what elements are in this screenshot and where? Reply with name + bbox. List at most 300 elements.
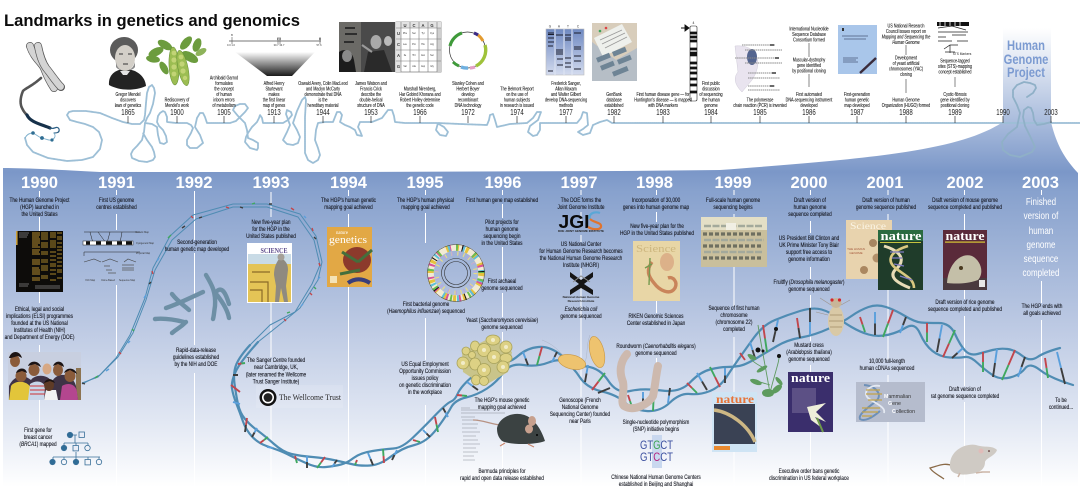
table: genetic code codons: Arg bbox=[430, 43, 435, 46]
event texts 1990 to 2003: (later renamed the Wellcome bbox=[246, 372, 306, 379]
event texts 1990 to 2003: implications (ELSI) programmes bbox=[6, 313, 73, 320]
year labels on timeline bbox=[121, 107, 1058, 117]
event texts on timeline: First automated bbox=[796, 91, 822, 97]
event texts 1990 to 2003: Executive order bans genetic bbox=[779, 468, 840, 475]
event texts 1990 to 2003: sequencing begins bbox=[713, 204, 753, 211]
year labels on timeline: 1985 bbox=[753, 107, 767, 117]
event texts on timeline: Gregor Mendel bbox=[116, 91, 140, 97]
year labels on timeline: 1972 bbox=[461, 107, 475, 117]
diagram: recombinant DNA plasmid bbox=[450, 32, 486, 68]
table: genetic code codons: Asn bbox=[421, 54, 426, 57]
event texts 1990 to 2003: To be bbox=[1055, 397, 1067, 404]
year headers 1990 to 2003: 1992 bbox=[176, 173, 212, 192]
table: genetic code codons: Phe bbox=[403, 32, 408, 35]
event texts 1990 to 2003: (chromosome 22) bbox=[716, 319, 753, 326]
event texts 1990 to 2003: US Equal Employment bbox=[401, 361, 449, 368]
event texts on timeline: map developed bbox=[844, 103, 870, 108]
event texts on timeline: develop DNA-sequencing bbox=[545, 97, 588, 103]
HGP label in top timeline bbox=[1004, 38, 1048, 80]
diagram: sequence-tagged sites map bbox=[937, 22, 972, 56]
photo: Watson and Crick bbox=[339, 22, 395, 72]
event texts on timeline: Huntington's disease — is mapped bbox=[634, 97, 692, 103]
year headers 1990 to 2003: 1998 bbox=[636, 173, 673, 192]
image: E. coli bacteria bbox=[542, 335, 608, 372]
table: genetic code codons: Thr bbox=[412, 54, 416, 57]
event texts on timeline: of yeast artificial bbox=[893, 60, 919, 66]
year headers 1990 to 2003: 1993 bbox=[253, 173, 289, 192]
event texts 1990 to 2003: Joint Genome Institute bbox=[557, 204, 605, 211]
event texts 1990 to 2003: Rapid-data-release bbox=[176, 347, 216, 354]
event texts on timeline: Archibald Garrod bbox=[210, 75, 239, 81]
year labels on timeline: 1977 bbox=[559, 107, 573, 117]
table: genetic code codons: A bbox=[397, 53, 400, 58]
event texts on timeline: discovers bbox=[120, 97, 136, 103]
event texts 1990 to 2003: Sequencing Center) founded bbox=[550, 411, 610, 418]
year labels on timeline: 1982 bbox=[607, 107, 621, 117]
event texts 1990 to 2003: Institute (NHGRI) bbox=[563, 262, 599, 269]
event texts 1990 to 2003: Draft version of human bbox=[862, 197, 910, 204]
event texts 1990 to 2003: mapping goal achieved bbox=[401, 204, 450, 211]
event texts on timeline: Organization (HUGO) formed bbox=[882, 102, 931, 108]
event texts 1990 to 2003: Genoscope (French bbox=[559, 397, 601, 404]
event texts on timeline bbox=[115, 23, 972, 108]
image: lab mouse with genetic map table bbox=[461, 408, 545, 460]
sequence: SNP GTGCT alignment: GTGCT bbox=[640, 438, 674, 452]
image: Arabidopsis plant bbox=[747, 325, 784, 397]
image: Nature 2000 Arabidopsis cover: nature bbox=[791, 371, 831, 385]
event texts 1990 to 2003: Center established in Japan bbox=[627, 320, 685, 327]
event texts on timeline: First-generation bbox=[844, 91, 870, 97]
title: Landmarks in genetics and genomics bbox=[4, 11, 300, 30]
event texts on timeline: of metabolism bbox=[212, 103, 236, 108]
event texts 1990 to 2003: sequence completed bbox=[788, 211, 832, 218]
event texts 1990 to 2003: New five-year plan bbox=[252, 219, 290, 226]
event texts on timeline: The Belmont Report bbox=[500, 86, 534, 92]
event texts on timeline: makes bbox=[268, 92, 280, 97]
event texts on timeline: positional cloning bbox=[941, 103, 970, 108]
image: Nature 2000 Arabidopsis cover bbox=[788, 371, 833, 432]
logo: National Human Genome Research Institute: National Human Genome bbox=[563, 295, 600, 299]
event texts on timeline: in research is issued bbox=[500, 103, 534, 108]
photo: sequencing laboratory 1999 bbox=[701, 217, 767, 267]
year headers 1990 to 2003: 1990 bbox=[21, 173, 58, 192]
event texts on timeline: Oswald Avery, Colin MacLeod bbox=[298, 80, 348, 86]
event texts 1990 to 2003: in the workplace bbox=[408, 389, 442, 396]
diagram: polymerase chain reaction bbox=[735, 45, 782, 92]
event texts on timeline: human genetic bbox=[845, 97, 870, 103]
logo: Mammalian Gene Collection bbox=[856, 382, 925, 422]
event texts on timeline: Har Gobind Khorana and bbox=[399, 91, 441, 97]
diagram: bacterial genome ring bbox=[428, 244, 484, 302]
image: Science anatomy cover 1998: Science bbox=[636, 244, 677, 255]
diagram: chromosome 4 with Huntington marker: 4 bbox=[693, 21, 695, 25]
event texts on timeline: The polymerase bbox=[747, 97, 774, 103]
image: HGP report cover bbox=[838, 25, 877, 74]
year labels on timeline: 1953 bbox=[364, 107, 378, 117]
event texts 1990 to 2003: (SNP) initiative begins bbox=[633, 426, 679, 433]
image: Science 2001 cover: THE HUMAN bbox=[847, 247, 865, 251]
event texts 1990 to 2003: centres established bbox=[96, 204, 137, 211]
image: Nature Genetics cover bbox=[327, 227, 372, 287]
event texts on timeline: the genetic code bbox=[406, 103, 434, 108]
diagram: sequence-tagged sites map: STS Markers bbox=[953, 52, 972, 56]
event texts on timeline: Marshall Nirenberg, bbox=[404, 86, 436, 92]
diagram: genetic, cytogenetic and physical maps 1991: Sequence Map bbox=[119, 279, 136, 282]
event texts 1990 to 2003: The DOE forms the bbox=[561, 197, 601, 204]
event texts 1990 to 2003: for the HGP in the bbox=[252, 226, 290, 233]
icon: chromosome X with unravelling DNA bbox=[21, 46, 61, 142]
event texts on timeline: human subjects bbox=[504, 97, 531, 103]
event texts 1990 to 2003: The Human Genome Project bbox=[10, 197, 70, 204]
logo: Mammalian Gene Collection: Collection bbox=[892, 409, 915, 415]
event texts 1990 to 2003: founded at the US National bbox=[11, 320, 68, 327]
table: genetic code codons: Leu bbox=[403, 43, 408, 46]
event texts on timeline: the first linear bbox=[263, 97, 286, 103]
event texts on timeline: Frederick Sanger, bbox=[551, 80, 581, 86]
callout: finished version of human genome sequence completed: human bbox=[1029, 225, 1053, 236]
event texts 1990 to 2003: continued... bbox=[1049, 404, 1074, 411]
table: genetic code codons: Ser bbox=[430, 54, 434, 57]
event texts 1990 to 2003: (HGP) launched in bbox=[20, 204, 59, 211]
event texts on timeline: is the bbox=[319, 97, 328, 103]
image: Science 2001 cover: GENOME bbox=[849, 251, 863, 255]
callout: finished version of human genome sequence completed: genome bbox=[1027, 239, 1055, 250]
diagram: genetic, cytogenetic and physical maps 1991: Clone-Based bbox=[101, 279, 116, 282]
event texts 1990 to 2003: Ethical, legal and social bbox=[15, 306, 64, 313]
event texts 1990 to 2003: The HGP's human genetic bbox=[321, 197, 376, 204]
event texts on timeline: the human bbox=[702, 97, 720, 103]
event texts 1990 to 2003: chromosome bbox=[720, 312, 748, 319]
image: Science cover 1993 bbox=[247, 243, 292, 303]
event texts on timeline: methods bbox=[559, 103, 574, 108]
event texts on timeline: Mendel's work bbox=[165, 102, 189, 108]
image: yeast cells bbox=[457, 335, 512, 386]
year headers 1990 to 2003: 1994 bbox=[330, 173, 368, 192]
event texts 1990 to 2003: genome sequenced bbox=[481, 285, 523, 292]
logo: National Human Genome Research Institute bbox=[563, 272, 600, 303]
photo: children ethical implications bbox=[8, 352, 81, 400]
diagram: genetic, cytogenetic and physical maps 1991 bbox=[83, 231, 155, 282]
event texts 1990 to 2003: genome sequenced bbox=[635, 350, 677, 357]
event texts on timeline: map of genes bbox=[263, 103, 286, 108]
callout: finished version of human genome sequence completed bbox=[1023, 196, 1059, 278]
image: Science 2001 cover bbox=[846, 220, 892, 279]
event texts on timeline: database bbox=[606, 97, 622, 103]
event texts 1990 to 2003: genome sequence published bbox=[856, 204, 916, 211]
diagram: BRCA1 pedigree bbox=[50, 432, 102, 465]
event texts on timeline: Robert Holley determine bbox=[400, 97, 441, 103]
event texts on timeline: DNA-sequencing instrument bbox=[786, 97, 833, 103]
event texts 1990 to 2003: Draft version of rice genome bbox=[935, 299, 995, 306]
event texts on timeline: Muscular-dystrophy bbox=[793, 57, 826, 63]
event texts 1990 to 2003: 10,000 full-length bbox=[869, 358, 905, 365]
event texts on timeline: chain reaction (PCR) is invented bbox=[733, 102, 787, 108]
sequence: SNP GTGCT alignment: GTCCT bbox=[640, 450, 674, 464]
event texts on timeline: Human Genome bbox=[892, 97, 920, 103]
event texts 1990 to 2003: First bacterial genome bbox=[403, 301, 449, 308]
year labels on timeline: 1974 bbox=[510, 107, 524, 117]
table: genetic code codons: Cys bbox=[430, 32, 435, 35]
chart: first linear gene map bbox=[227, 33, 322, 76]
event texts 1990 to 2003: mapping goal achieved bbox=[324, 204, 373, 211]
image: Nature Genetics cover: genetics bbox=[329, 235, 367, 246]
event texts on timeline: established bbox=[605, 103, 624, 108]
event texts on timeline: developed bbox=[800, 103, 818, 108]
table: genetic code codons: Gly bbox=[430, 65, 435, 68]
table: genetic code codons: Ala bbox=[412, 65, 416, 68]
event texts on timeline: James Watson and bbox=[355, 80, 387, 86]
event texts on timeline: on the use of bbox=[506, 91, 528, 97]
event texts on timeline: Human Genome bbox=[892, 40, 920, 45]
event texts 1990 to 2003: discrimination in US federal workplace bbox=[769, 475, 849, 482]
event texts on timeline: Consortium formed bbox=[793, 37, 825, 43]
event texts on timeline: hereditary material bbox=[308, 103, 338, 108]
event texts 1990 to 2003: First gene for bbox=[24, 427, 52, 434]
event texts on timeline: the concept bbox=[214, 86, 234, 92]
logo: Mammalian Gene Collection: Mammalian bbox=[884, 394, 911, 400]
event texts 1990 to 2003: breast cancer bbox=[24, 434, 52, 441]
event texts on timeline: chromosomes (YAC) bbox=[889, 66, 924, 72]
event texts 1990 to 2003: (BRCA1) mapped bbox=[19, 441, 57, 448]
logo: Joint Genome Institute bbox=[558, 211, 604, 233]
event texts on timeline: US National Research bbox=[888, 23, 925, 29]
diagram: genetic, cytogenetic and physical maps 1991: Physical Map bbox=[136, 252, 151, 255]
event texts on timeline: Allan Maxam bbox=[555, 86, 577, 92]
logo: The Wellcome Trust: The Wellcome Trust bbox=[279, 393, 342, 402]
table: genetic code codons: C bbox=[412, 23, 416, 28]
event texts 1990 to 2003: US President Bill Clinton and bbox=[779, 235, 839, 242]
image: Nature 2002 mouse cover bbox=[943, 229, 987, 290]
chromosome thread running along the timeline bbox=[25, 82, 1080, 163]
event texts on timeline: demonstrate that DNA bbox=[305, 92, 341, 97]
event texts 1990 to 2003: The HGP ends with bbox=[1022, 303, 1062, 310]
table: genetic code codons: G bbox=[397, 64, 400, 69]
diagram: genetic, cytogenetic and physical maps 1991: Cytogenetic Map bbox=[136, 242, 155, 245]
event texts on timeline: laws of genetics bbox=[115, 103, 142, 108]
event texts 1990 to 2003: for Human Genome Research becomes bbox=[539, 248, 623, 255]
table: genetic code codons: C bbox=[397, 42, 400, 47]
year headers 1990 to 2003: 1991 bbox=[98, 173, 135, 192]
event texts 1990 to 2003: RIKEN Genomic Sciences bbox=[629, 313, 684, 320]
event texts 1990 to 2003: near Cambridge, UK, bbox=[254, 365, 298, 371]
event texts on timeline: Stanley Cohen and bbox=[452, 80, 484, 86]
year guide lines bbox=[40, 190, 1042, 487]
event texts 1990 to 2003 bbox=[5, 197, 1074, 487]
chart: first linear gene map: B bbox=[231, 33, 233, 37]
year headers 1990 to 2003: 2000 bbox=[791, 173, 827, 192]
event texts on timeline: gene identified bbox=[797, 62, 822, 68]
event texts 1990 to 2003: Escherichia coli bbox=[565, 306, 598, 313]
image: DNA sequencing gel bbox=[546, 24, 584, 75]
event texts 1990 to 2003: sequence completed and published bbox=[928, 306, 1002, 313]
event texts 1990 to 2003: First archaeal bbox=[488, 278, 516, 285]
event texts 1990 to 2003: Draft version of bbox=[794, 197, 826, 204]
event texts 1990 to 2003: issues policy bbox=[412, 375, 439, 382]
event texts on timeline: and Maclyn McCarty bbox=[306, 86, 341, 92]
year labels on timeline: 1944 bbox=[316, 107, 330, 117]
year headers 1990 to 2003: 2001 bbox=[867, 173, 903, 192]
event texts 1990 to 2003: Chinese National Human Genome Centers bbox=[611, 474, 701, 481]
year labels on timeline: 1989 bbox=[948, 107, 962, 117]
table: genetic code codons: A bbox=[421, 23, 425, 28]
event texts 1990 to 2003: Opportunity Commission bbox=[399, 368, 451, 375]
event texts on timeline: recombinant bbox=[458, 97, 479, 103]
event texts 1990 to 2003: First US genome bbox=[99, 197, 134, 204]
image: DNA sequencing gel: G bbox=[549, 24, 552, 28]
event texts 1990 to 2003: Institutes of Health (NIH) bbox=[14, 327, 65, 334]
callout: finished version of human genome sequence completed: version of bbox=[1024, 210, 1059, 221]
event texts on timeline: Council issues report on bbox=[886, 28, 926, 34]
event texts 1990 to 2003: all goals achieved bbox=[1023, 310, 1061, 317]
image: DNA sequencing gel: C bbox=[577, 24, 580, 28]
year headers 1990 to 2003: 2003 bbox=[1022, 173, 1059, 192]
panel: Human Genome Project timeline 1990 to 2003 bbox=[5, 173, 1074, 487]
year labels on timeline: 1966 bbox=[413, 107, 427, 117]
event texts 1990 to 2003: Trust Sanger Institute) bbox=[253, 379, 299, 386]
event texts 1990 to 2003: Pilot projects for bbox=[485, 219, 519, 226]
year labels on timeline: 1984 bbox=[704, 107, 718, 117]
event texts on timeline: GenBank bbox=[606, 91, 622, 97]
table: genetic code codons: Ile bbox=[404, 54, 407, 57]
image: Nature 2001 cover with DNA bbox=[878, 229, 923, 290]
year ticks on timeline bbox=[128, 116, 1051, 123]
event texts on timeline: formulates bbox=[215, 80, 233, 86]
table: genetic code codons: Ser bbox=[412, 32, 416, 35]
event texts 1990 to 2003: The HGP's mouse genetic bbox=[475, 397, 530, 404]
event texts 1990 to 2003: in the United States bbox=[481, 240, 523, 247]
table: genetic code codons: Asp bbox=[421, 65, 426, 68]
logo: Joint Genome Institute: DOE JOINT GENOME INSTITUTE bbox=[558, 229, 604, 233]
year labels on timeline: 1865 bbox=[121, 107, 135, 117]
logo: National Human Genome Research Institute: Research Institute bbox=[568, 299, 595, 303]
event texts 1990 to 2003: support free access to bbox=[786, 249, 832, 256]
panel: pre-project timeline 1865 to 1989 bbox=[21, 21, 1080, 163]
event texts 1990 to 2003: human cDNAs sequenced bbox=[860, 365, 914, 372]
event texts on timeline: sites (STS)-mapping bbox=[938, 63, 972, 69]
event texts on timeline: First human disease gene — for bbox=[636, 91, 690, 97]
event texts on timeline: of human bbox=[216, 92, 232, 97]
event texts 1990 to 2003: sequencing begin bbox=[484, 233, 520, 240]
year labels on timeline: 1988 bbox=[899, 107, 913, 117]
table: genetic code codons: His bbox=[421, 43, 426, 46]
event texts on timeline: Rediscovery of bbox=[165, 97, 190, 103]
event texts 1990 to 2003: rat genome sequence completed bbox=[931, 393, 999, 400]
event texts 1990 to 2003: human genome bbox=[794, 204, 826, 211]
event texts on timeline: discussion bbox=[702, 86, 720, 92]
sequence: SNP GTGCT alignment bbox=[640, 435, 674, 468]
event texts on timeline: inborn errors bbox=[213, 97, 235, 103]
event texts 1990 to 2003: The Sanger Centre founded bbox=[247, 357, 305, 364]
event texts 1990 to 2003: HGP in the United States published bbox=[620, 230, 694, 237]
event texts 1990 to 2003: guidelines established bbox=[173, 354, 219, 361]
event texts 1990 to 2003: Draft version of mouse genome bbox=[932, 197, 998, 204]
event texts 1990 to 2003: Single-nucleotide polymorphism bbox=[623, 419, 690, 426]
event texts 1990 to 2003: human genome bbox=[486, 226, 518, 233]
event texts on timeline: First public bbox=[702, 80, 721, 86]
chart: first linear gene map: 30.7 33.7 bbox=[274, 43, 285, 47]
event texts on timeline: by positional cloning bbox=[792, 68, 826, 74]
event texts on timeline: DNA technology bbox=[455, 103, 482, 108]
image: pea plant bbox=[145, 34, 208, 87]
event texts 1990 to 2003: completed bbox=[723, 326, 745, 333]
event texts on timeline: describe the bbox=[361, 92, 382, 97]
event texts 1990 to 2003: United States published bbox=[246, 233, 296, 240]
event texts 1990 to 2003: Incorporation of 30,000 bbox=[632, 197, 680, 204]
event texts on timeline: Francis Crick bbox=[360, 86, 382, 92]
event texts 1990 to 2003: Roundworm (Caenorhabditis elegans) bbox=[616, 343, 696, 350]
event texts 1990 to 2003: Full-scale human genome bbox=[706, 197, 760, 204]
event texts on timeline: gene identified by bbox=[940, 97, 970, 103]
callout: finished version of human genome sequence completed: Finished bbox=[1026, 196, 1056, 207]
event texts 1990 to 2003: mapping goal achieved bbox=[478, 404, 526, 411]
event texts on timeline: double-helical bbox=[359, 97, 383, 103]
event texts on timeline: cloning bbox=[900, 72, 912, 77]
table: genetic code codons: U bbox=[403, 23, 407, 28]
event texts 1990 to 2003: rapid and open data release established bbox=[460, 475, 544, 482]
event texts 1990 to 2003: Yeast (Saccharomyces cerevisiae) bbox=[466, 317, 538, 324]
image: fruitfly bbox=[816, 298, 850, 336]
event texts on timeline: Sequence Database bbox=[792, 31, 826, 37]
event texts 1990 to 2003: genes into human genome map bbox=[623, 204, 689, 211]
event texts 1990 to 2003: (Haemophilus influenzae) sequenced bbox=[387, 308, 465, 315]
year headers 1990 to 2003: 1996 bbox=[485, 173, 521, 192]
diagram: chromosome 4 with Huntington marker bbox=[681, 21, 697, 101]
chart: first linear gene map: 57.6 bbox=[316, 43, 322, 47]
image: roundworm bbox=[621, 354, 658, 408]
event texts on timeline: structure of DNA bbox=[357, 103, 385, 108]
table: genetic code codons: Tyr bbox=[421, 32, 425, 35]
event texts on timeline: and Walter Gilbert bbox=[551, 92, 582, 97]
chart: DNA double helix running through the years bbox=[82, 203, 1073, 468]
image: white rat bbox=[930, 445, 997, 479]
event texts 1990 to 2003: Sequence of first human bbox=[708, 305, 760, 312]
event texts 1990 to 2003: on genetic discrimination bbox=[399, 382, 451, 389]
event texts 1990 to 2003: human genetic map developed bbox=[165, 246, 229, 253]
event texts on timeline: Development bbox=[895, 55, 918, 61]
image: Nature Genetics cover: nature bbox=[336, 231, 348, 236]
event texts 1990 to 2003: near Paris bbox=[569, 418, 591, 425]
chart: first linear gene map: P R bbox=[277, 37, 281, 41]
table: genetic code codons bbox=[396, 22, 441, 72]
event texts on timeline: Mapping and Sequencing the bbox=[882, 34, 931, 40]
image: Science 2001 cover: Science bbox=[850, 222, 886, 232]
diagram: genetic, cytogenetic and physical maps 1991: YAC Map bbox=[85, 279, 96, 282]
event texts 1990 to 2003: by the NIH and DOE bbox=[175, 361, 218, 368]
event texts 1990 to 2003: (Arabidopsis thaliana) bbox=[786, 349, 832, 356]
event texts 1990 to 2003: Fruitfly (Drosophila melanogaster) bbox=[774, 279, 844, 286]
image: Nature 1999 chromosome 22 cover: nature bbox=[716, 392, 755, 406]
callout: finished version of human genome sequence completed: completed bbox=[1023, 267, 1059, 278]
event texts on timeline: Herbert Boyer bbox=[456, 86, 480, 92]
event texts 1990 to 2003: sequence completed and published bbox=[928, 204, 1002, 211]
year headers 1990 to 2003: 1997 bbox=[561, 173, 597, 192]
callout: finished version of human genome sequence completed: sequence bbox=[1024, 253, 1058, 264]
table: genetic code codons: G bbox=[430, 23, 434, 28]
event texts on timeline: develop bbox=[461, 92, 475, 97]
image: Nature 2002 mouse cover: nature bbox=[946, 229, 985, 243]
year labels on timeline: 1900 bbox=[170, 107, 184, 117]
image: Nature 1999 chromosome 22 cover bbox=[712, 392, 757, 452]
HGP label in top timeline: Project bbox=[1007, 65, 1046, 80]
event texts 1990 to 2003: Bermuda principles for bbox=[478, 468, 526, 475]
event texts 1990 to 2003: the National Human Genome Research bbox=[540, 255, 622, 262]
year labels on timeline: 1987 bbox=[850, 107, 864, 117]
event texts on timeline: Alfred Henry bbox=[264, 80, 285, 86]
event texts 1990 to 2003: New five-year plan for the bbox=[630, 223, 684, 230]
event texts 1990 to 2003: and Department of Energy (DOE) bbox=[5, 334, 75, 341]
table: genetic code codons: U bbox=[397, 31, 400, 36]
logo: Joint Genome Institute: JGI bbox=[558, 211, 590, 232]
